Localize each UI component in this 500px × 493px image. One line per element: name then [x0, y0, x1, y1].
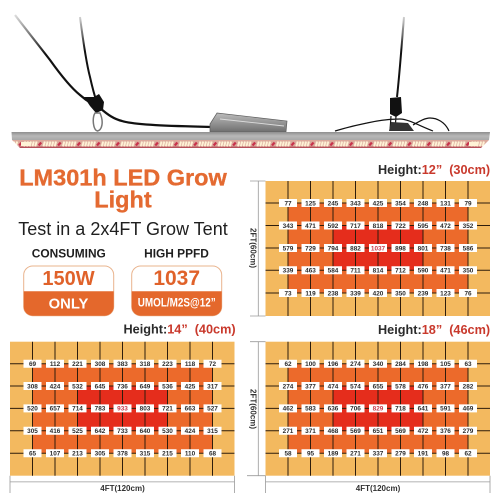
PPFD values: 729: [305, 245, 316, 252]
PPFD values: 308: [95, 361, 106, 368]
PPFD values: 282: [463, 383, 474, 390]
PPFD values: 79: [464, 200, 472, 207]
PPFD values: 76: [464, 290, 472, 297]
subtitle: Test in a 2x4FT Grow Tent: [18, 219, 228, 239]
PPFD values: 305: [27, 428, 38, 435]
PPFD values: 536: [162, 383, 173, 390]
PPFD values: 196: [328, 361, 339, 368]
PPFD values: 721: [162, 406, 173, 413]
PPFD values: 898: [395, 245, 406, 252]
PPFD values: 343: [350, 200, 361, 207]
middle zone: [288, 203, 468, 293]
PPFD values: 274: [283, 383, 294, 390]
PPFD values: 642: [95, 428, 106, 435]
consuming card lower band: [24, 291, 114, 316]
PPFD values: 649: [140, 383, 151, 390]
hanging cable: left rope: [80, 17, 97, 103]
PPFD values: 191: [418, 451, 429, 458]
PPFD values: 584: [328, 268, 339, 275]
PPFD values: 239: [418, 290, 429, 297]
PPFD values: 354: [395, 200, 406, 207]
PPFD values: 1037: [371, 245, 386, 252]
PPFD values: 655: [373, 383, 384, 390]
PPFD values: 882: [350, 245, 361, 252]
PPFD values: 371: [305, 428, 316, 435]
connector block: [389, 122, 414, 131]
PPFD values: 98: [442, 451, 449, 458]
heading: height 12 in: Height:12” (30cm): [378, 163, 490, 177]
axis label: 2FT: 2FT(60cm): [248, 389, 258, 429]
PPFD values: 376: [440, 428, 451, 435]
PPFD values: 213: [72, 451, 83, 458]
wattage value: 150W: [42, 268, 95, 290]
PPFD values: 474: [328, 383, 339, 390]
PPFD values: 73: [284, 290, 292, 297]
consuming label: CONSUMING: [32, 247, 106, 261]
PPFD values: 315: [207, 428, 218, 435]
PPFD values: [27, 361, 218, 458]
PPFD values: 420: [373, 290, 384, 297]
PPFD values: 284: [395, 361, 406, 368]
PPFD values: 462: [283, 406, 294, 413]
PPFD values: 223: [162, 361, 173, 368]
PPFD values: 378: [117, 451, 128, 458]
PPFD values: 425: [373, 200, 384, 207]
PPFD values: 592: [328, 223, 339, 230]
PPFD value: 1037: [153, 267, 200, 290]
PPFD values: 110: [185, 451, 196, 458]
light bar LED strip: [12, 140, 489, 148]
PPFD values: 712: [395, 268, 406, 275]
PPFD card lower band: [132, 291, 222, 316]
PPFD values: 62: [284, 361, 292, 368]
axis label: 2FT: 2FT(60cm): [248, 228, 258, 268]
PPFD values: 340: [373, 361, 384, 368]
PPFD values: 105: [440, 361, 451, 368]
PPFD values: 532: [72, 383, 83, 390]
PPFD values: 463: [305, 268, 316, 275]
PPFD values: 711: [350, 268, 361, 275]
PPFD values: 339: [283, 268, 294, 275]
outer zone: [266, 342, 490, 476]
PPFD values: 63: [464, 361, 472, 368]
PPFD values: 591: [440, 406, 451, 413]
PPFD values: 238: [328, 290, 339, 297]
centre zone: [333, 386, 423, 431]
heading: height 14 in: Height:14” (40cm): [124, 322, 236, 336]
axis label: 4FT: 4FT(120cm): [356, 484, 401, 493]
PPFD values: 271: [350, 451, 361, 458]
PPFD values: 586: [463, 245, 474, 252]
PPFD values: 72: [209, 361, 216, 368]
PPFD values: 641: [418, 406, 429, 413]
PPFD values: 424: [185, 428, 196, 435]
PPFD values: 645: [95, 383, 106, 390]
PPFD values: 595: [418, 223, 429, 230]
PPFD values: 476: [418, 383, 429, 390]
PPFD values: 472: [440, 223, 451, 230]
PPFD values: [283, 200, 474, 297]
PPFD values: 95: [307, 451, 314, 458]
middle zone: [288, 364, 468, 453]
PPFD values: 469: [463, 406, 474, 413]
heading: height 18 in: Height:18” (46cm): [378, 323, 490, 337]
PPFD values: [283, 361, 474, 458]
PPFD values: 736: [117, 383, 128, 390]
PPFD values: 933: [117, 406, 128, 413]
PPFD values: 579: [283, 245, 294, 252]
axis frame: 18 in chart: [247, 342, 490, 493]
PPFD values: 714: [72, 406, 83, 413]
PPFD values: 527: [207, 406, 218, 413]
PPFD values: 317: [207, 383, 218, 390]
PPFD values: 119: [305, 290, 316, 297]
end LEDs: [21, 142, 478, 146]
PPFD values: 569: [395, 428, 406, 435]
right side wiring: [335, 116, 449, 131]
PPFD values: 471: [440, 268, 451, 275]
PPFD values: 814: [373, 268, 384, 275]
PPFD values: 803: [140, 406, 151, 413]
PPFD values: 100: [305, 361, 316, 368]
PPFD values: 62: [464, 451, 472, 458]
PPFD values: 118: [185, 361, 196, 368]
PPFD values: 663: [185, 406, 196, 413]
light bar top face: [12, 132, 490, 140]
PPFD values: 590: [418, 268, 429, 275]
PPFD values: 315: [140, 451, 151, 458]
PPFD values: 425: [185, 383, 196, 390]
PPFD values: 318: [140, 361, 151, 368]
middle zone: [32, 364, 212, 453]
PPFD values: 350: [463, 268, 474, 275]
PPFD values: 125: [305, 200, 316, 207]
PPFD values: 818: [373, 223, 384, 230]
PPFD values: 377: [440, 383, 451, 390]
PPFD values: 471: [305, 223, 316, 230]
outer zone: [266, 181, 490, 316]
PPFD values: 377: [305, 383, 316, 390]
PPFD chart: height 12 in: [266, 181, 490, 316]
PPFD values: 245: [328, 200, 339, 207]
centre zone: [333, 226, 423, 270]
PPFD values: 530: [162, 428, 173, 435]
PPFD values: 112: [50, 361, 61, 368]
PPFD values: 123: [440, 290, 451, 297]
spec card: consuming: [24, 247, 114, 316]
PPFD values: 189: [328, 451, 339, 458]
PPFD values: 583: [305, 406, 316, 413]
PPFD values: 350: [395, 290, 406, 297]
PPFD values: 339: [350, 290, 361, 297]
PPFD values: 274: [350, 361, 361, 368]
axis frame: 12 in chart: [248, 181, 266, 316]
PPFD values: 578: [395, 383, 406, 390]
carabiner hook: [93, 113, 102, 131]
PPFD values: 221: [72, 361, 83, 368]
PPFD unit: UMOL/M2S@12”: [138, 298, 216, 310]
PPFD values: 58: [284, 451, 292, 458]
PPFD values: 68: [209, 451, 216, 458]
PPFD values: 569: [350, 428, 361, 435]
PPFD values: 198: [418, 361, 429, 368]
PPFD values: 77: [284, 200, 292, 207]
PPFD values: 215: [162, 451, 173, 458]
PPFD values: 352: [463, 223, 474, 230]
hanging cable: right rope: [397, 17, 404, 97]
PPFD values: 706: [350, 406, 361, 413]
PPFD values: 783: [95, 406, 106, 413]
PPFD values: 107: [50, 451, 61, 458]
PPFD values: 343: [283, 223, 294, 230]
PPFD values: 337: [373, 451, 384, 458]
ratchet hanger right: [390, 97, 402, 117]
PPFD values: 279: [463, 428, 474, 435]
PPFD values: 738: [440, 245, 451, 252]
PPFD values: 801: [418, 245, 429, 252]
axis label: 4FT: 4FT(120cm): [100, 484, 145, 493]
PPFD values: 829: [373, 406, 384, 413]
PPFD values: 636: [328, 406, 339, 413]
PPFD values: 718: [395, 406, 406, 413]
PPFD label: HIGH PPFD: [144, 247, 209, 261]
PPFD values: 520: [27, 406, 38, 413]
PPFD values: 640: [140, 428, 151, 435]
PPFD values: 305: [95, 451, 106, 458]
PPFD values: 279: [395, 451, 406, 458]
PPFD values: 794: [328, 245, 339, 252]
PPFD values: 651: [373, 428, 384, 435]
PPFD values: 574: [350, 383, 361, 390]
outer zone: [10, 342, 234, 476]
PPFD values: 424: [50, 383, 61, 390]
PPFD values: 248: [418, 200, 429, 207]
PPFD values: 722: [395, 223, 406, 230]
PPFD values: 65: [29, 451, 36, 458]
PPFD values: 416: [50, 428, 61, 435]
PPFD values: 733: [117, 428, 128, 435]
hanging cable: power lead left: [15, 15, 212, 127]
PPFD chart: height 14 in: [10, 342, 234, 476]
PPFD card outline: [132, 266, 222, 316]
spec card: high PPFD: [132, 247, 222, 316]
consuming card outline: [24, 266, 114, 316]
PPFD values: 472: [418, 428, 429, 435]
PPFD values: 308: [27, 383, 38, 390]
PPFD values: 468: [328, 428, 339, 435]
PPFD values: 525: [72, 428, 83, 435]
PPFD values: 271: [283, 428, 294, 435]
grow light fixture: [12, 15, 490, 148]
PPFD values: 131: [440, 200, 451, 207]
PPFD values: 657: [50, 406, 61, 413]
centre zone: [78, 386, 168, 431]
ratchet hanger left: [84, 94, 104, 113]
PPFD values: 717: [350, 223, 361, 230]
only label: ONLY: [49, 297, 89, 313]
PPFD chart: height 18 in: [266, 342, 490, 476]
axis frame: 14 in chart: [10, 476, 234, 493]
PPFD values: 69: [29, 361, 36, 368]
PPFD values: 383: [117, 361, 128, 368]
title: LM301h LED Grow: [19, 165, 227, 191]
title: Light: [94, 186, 152, 212]
LED driver box: [210, 113, 287, 132]
